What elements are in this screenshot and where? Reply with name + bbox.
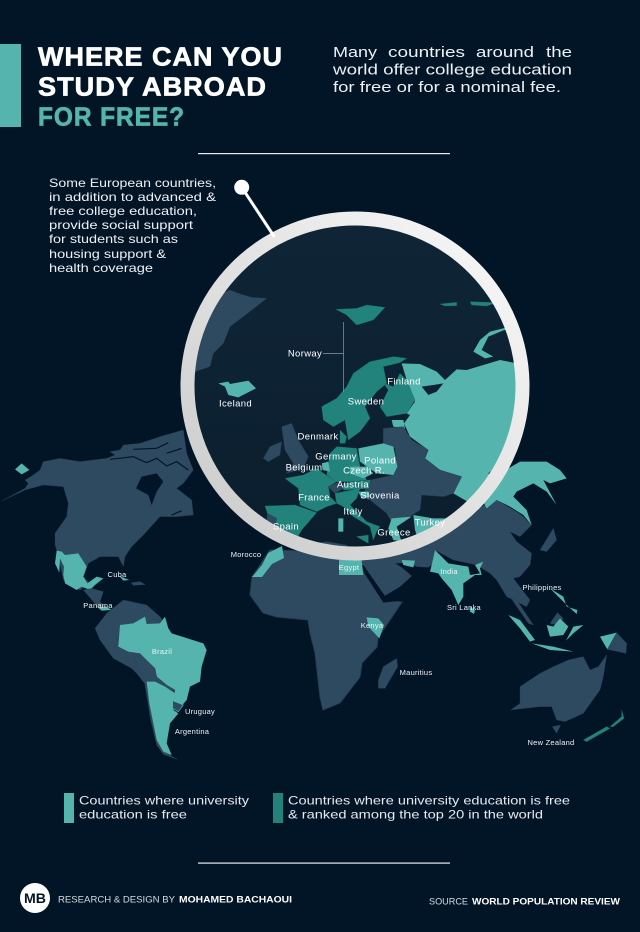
credit: RESEARCH & DESIGN BY	[58, 894, 175, 904]
legend: free and top 20: Countries where university education is free	[288, 794, 570, 808]
callout text: health coverage	[49, 261, 153, 275]
callout text: in addition to advanced &	[49, 190, 216, 204]
svalbard	[336, 305, 385, 325]
slovenia	[358, 492, 370, 498]
europe country labels: Germany	[315, 452, 357, 462]
title	[38, 42, 283, 132]
intro text: countries	[388, 44, 465, 61]
callout text: free college education,	[49, 204, 197, 218]
world country labels: India	[440, 567, 458, 576]
europe country labels: Denmark	[298, 432, 338, 442]
russia	[402, 360, 516, 502]
world country labels: Kenya	[361, 621, 384, 630]
circle disc	[190, 221, 520, 551]
europe country labels: Finland	[387, 376, 421, 388]
alaska islands	[15, 463, 29, 474]
legend: free and top 20: & ranked among the top 20 in the world	[288, 808, 543, 822]
credit	[58, 894, 292, 904]
magnified europe circle	[180, 218, 533, 563]
world country labels: Uruguay	[185, 707, 215, 716]
europe country labels: Slovenia	[360, 490, 400, 502]
middle east and asia	[340, 500, 532, 607]
title accent bar	[0, 44, 21, 127]
europe country labels: Sweden	[348, 396, 384, 408]
intro text: for free or for a nominal fee.	[333, 79, 561, 96]
scandinavia	[322, 357, 407, 440]
south america	[95, 600, 177, 759]
world country labels: Egypt	[339, 563, 360, 572]
czech republic	[350, 467, 373, 478]
turkey	[413, 515, 446, 534]
borneo	[547, 618, 568, 637]
north america	[2, 430, 193, 590]
intro text	[332, 44, 572, 96]
middle east	[443, 500, 533, 563]
eastern europe	[362, 427, 462, 525]
new zealand	[583, 710, 624, 742]
philippines	[550, 588, 577, 614]
europe country labels: Spain	[273, 522, 299, 532]
mongolia edge	[488, 462, 505, 482]
legend: free and top 20	[273, 793, 570, 823]
papua	[600, 633, 617, 649]
kenya	[367, 617, 384, 638]
legend: free: education is free	[79, 808, 187, 822]
australia	[511, 655, 607, 722]
europe country labels: Turkey	[415, 518, 445, 528]
sri lanka	[470, 607, 475, 614]
spain	[264, 504, 317, 536]
uruguay	[173, 701, 183, 712]
source: SOURCE	[429, 896, 468, 906]
europe country labels: Iceland	[219, 398, 252, 410]
sulawesi	[566, 625, 583, 641]
top divider	[198, 153, 450, 154]
germany	[327, 447, 367, 482]
credit: MOHAMED BACHAOUI	[179, 894, 292, 904]
sumatra	[508, 615, 535, 642]
white sea	[422, 383, 443, 395]
brazil	[118, 617, 207, 712]
intro text: around	[476, 44, 534, 61]
intro text: Many	[333, 44, 378, 61]
callout text	[49, 176, 216, 275]
greenland	[195, 290, 267, 372]
india	[430, 550, 483, 605]
austria	[343, 480, 370, 490]
callout text: provide social support	[49, 218, 194, 232]
france	[285, 468, 337, 512]
bolivia and paraguay	[133, 653, 175, 695]
europe country labels: Belgium	[286, 462, 322, 474]
source: WORLD POPULATION REVIEW	[472, 896, 621, 906]
mongolia edge	[488, 470, 492, 474]
sicily	[357, 535, 368, 543]
world country labels: Sri Lanka	[447, 603, 482, 612]
legend: free: Countries where university	[79, 794, 249, 808]
malay peninsula	[510, 597, 533, 625]
norway leader line	[323, 322, 344, 392]
world country labels: Mauritius	[400, 668, 432, 677]
world country labels: Morocco	[231, 550, 261, 559]
intro text: world offer college education	[332, 62, 572, 78]
world country labels: Argentina	[175, 727, 210, 736]
africa	[250, 550, 402, 710]
franz josef land	[440, 302, 497, 306]
denmark	[340, 430, 347, 443]
world country labels: Philippines	[522, 583, 562, 592]
asia and oceania	[339, 462, 627, 742]
world country labels: Panama	[83, 601, 113, 610]
argentina	[147, 682, 178, 755]
borneo north	[550, 613, 563, 625]
hispaniola	[131, 582, 145, 585]
ireland	[263, 442, 282, 462]
red sea	[359, 565, 402, 603]
bottom divider	[198, 862, 450, 864]
callout text: housing support &	[49, 247, 166, 261]
switzerland	[328, 482, 343, 493]
poland	[358, 443, 397, 475]
estonia	[392, 420, 405, 428]
europe country labels: Greece	[377, 528, 411, 538]
world country labels	[83, 550, 574, 747]
italy	[335, 488, 380, 540]
world map	[2, 430, 627, 759]
europe country labels: Poland	[364, 456, 396, 466]
legend: free	[64, 793, 249, 823]
europe country labels: Italy	[343, 506, 363, 518]
java	[532, 643, 573, 652]
europe country labels: Austria	[337, 480, 369, 490]
portugal	[266, 513, 277, 526]
iceland	[218, 381, 256, 397]
cuba	[119, 576, 129, 581]
panama	[98, 607, 112, 611]
europe map	[195, 290, 516, 546]
europe country labels	[219, 348, 445, 538]
papua new guinea	[607, 633, 627, 653]
hudson bay	[136, 473, 163, 505]
logo	[20, 883, 50, 913]
egypt	[339, 560, 363, 575]
americas	[2, 430, 207, 759]
novaya zemlya	[473, 328, 506, 358]
world country labels: Cuba	[108, 570, 127, 579]
source	[429, 896, 621, 906]
sardinia	[338, 518, 343, 532]
logo: MB	[24, 890, 46, 906]
japan	[540, 528, 557, 552]
europe country labels: Czech R.	[343, 466, 385, 476]
europe country labels: France	[298, 492, 330, 504]
callout dot and line	[234, 180, 274, 237]
circle ring	[188, 218, 522, 554]
mexico	[55, 551, 103, 590]
world country labels: New Zealand	[528, 738, 574, 747]
arctic straits	[110, 443, 188, 515]
central america	[83, 588, 107, 610]
belgium	[322, 462, 330, 472]
tasmania	[552, 725, 561, 733]
north africa	[320, 542, 348, 546]
callout text: for students such as	[49, 232, 178, 246]
callout text: Some European countries,	[49, 176, 216, 190]
title: STUDY ABROAD	[38, 72, 267, 102]
gulf state	[402, 560, 415, 567]
intro text: the	[546, 44, 572, 61]
greece	[388, 517, 412, 542]
morocco	[252, 546, 284, 577]
great britain	[282, 423, 308, 473]
finland	[380, 373, 415, 417]
world country labels: Brazil	[152, 647, 172, 656]
title: FOR FREE?	[38, 102, 185, 132]
madagascar	[378, 658, 398, 688]
title: WHERE CAN YOU	[38, 42, 283, 72]
russia east	[477, 462, 567, 525]
europe country labels: Norway	[288, 348, 322, 360]
